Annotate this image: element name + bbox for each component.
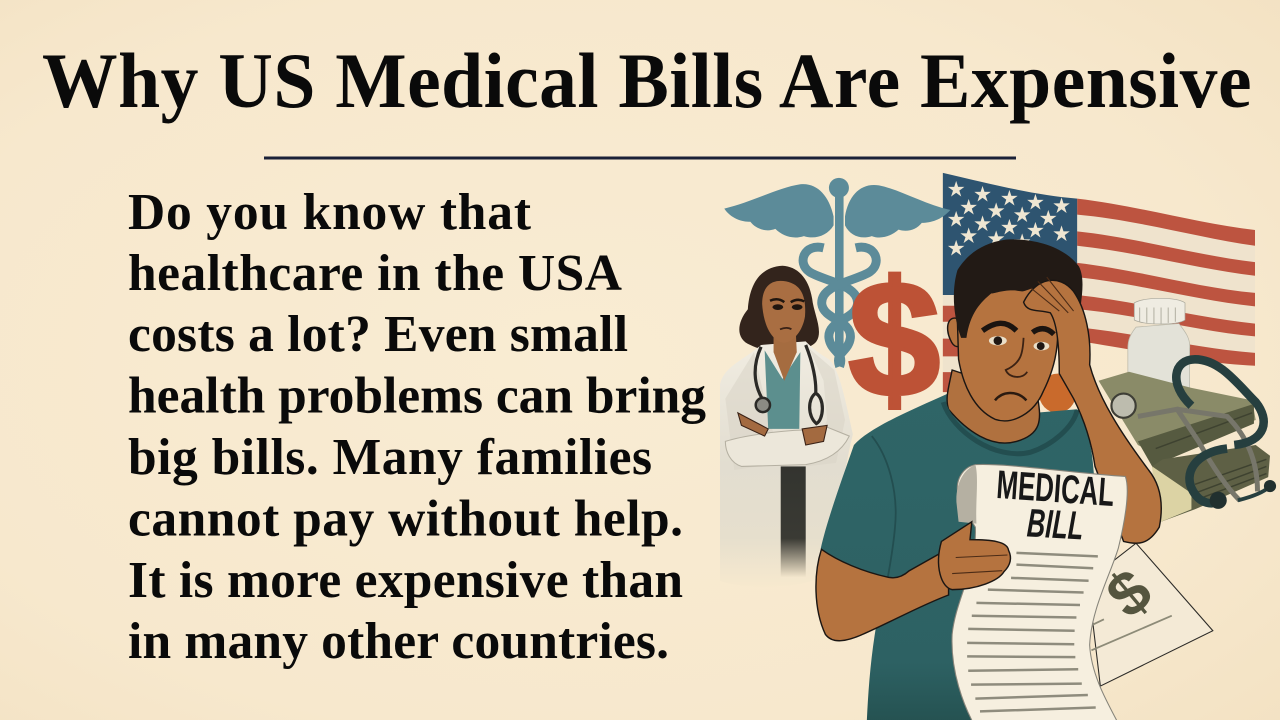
illustration: [720, 173, 1276, 720]
man ear: [948, 318, 963, 347]
body paragraph: Do you know that: [128, 184, 531, 241]
icon: stacks of money: [1099, 372, 1270, 522]
icon: American flag: ★: [988, 229, 1005, 250]
icon: American flag: ★: [1027, 193, 1044, 214]
title: Why US Medical Bills Are Expensive: [42, 37, 1252, 124]
man head: [957, 277, 1058, 421]
bill heading: MEDICAL: [995, 463, 1116, 515]
doctor arms: [725, 427, 849, 466]
body paragraph: healthcare in the USA: [128, 245, 622, 302]
icon: American flag: ★: [1014, 205, 1031, 226]
doctor figure: [720, 266, 853, 587]
icon: American flag: ★: [1027, 220, 1044, 241]
man neck: [947, 370, 1040, 443]
icon: American flag: ★: [1040, 209, 1057, 230]
icon: American flag: ★: [948, 180, 965, 201]
shirt collar: [943, 402, 1077, 454]
icon: stethoscope: [1176, 359, 1272, 503]
title underline: [264, 156, 1016, 160]
doctor trousers: [781, 466, 806, 577]
doctor scrubs: [765, 350, 800, 429]
man eyebrows and eyes: [982, 323, 1054, 334]
icon: American flag: ★: [960, 226, 977, 247]
man figure: [816, 239, 1161, 720]
man hand on bill: [939, 522, 1010, 590]
man lower arm: [816, 549, 949, 641]
body paragraph: costs a lot? Even small: [128, 306, 628, 363]
icon: caduceus: [724, 178, 950, 366]
doctor face: [762, 281, 805, 343]
second paper bill: [1088, 543, 1213, 686]
second paper bill: $: [1093, 556, 1165, 632]
icon: American flag: [943, 173, 1255, 392]
icon: American flag: ★: [988, 201, 1005, 222]
raised hand finger lines: [1031, 277, 1074, 313]
man hair: [954, 239, 1082, 338]
bill heading: BILL: [1026, 501, 1085, 548]
man nose and mouth: [1006, 338, 1027, 377]
icon: dollar sign: $: [849, 247, 940, 431]
icon: American flag: ★: [974, 184, 991, 205]
body paragraph: cannot pay without help.: [128, 490, 683, 548]
icon: American flag: ★: [1014, 232, 1031, 253]
doctor coat: [720, 341, 853, 587]
icon: American flag: ★: [1001, 189, 1018, 210]
doctor eyes and mouth: [770, 299, 804, 302]
icon: American flag: ★: [948, 209, 965, 230]
body paragraph: big bills. Many families: [128, 429, 652, 486]
doctor neck: [774, 331, 797, 381]
bill heading: [995, 463, 1116, 548]
body paragraph: [128, 184, 706, 670]
icon: American flag: ★: [1053, 224, 1070, 245]
bill text lines: [967, 553, 1105, 720]
body paragraph: in many other countries.: [128, 613, 669, 670]
icon: American flag: ★: [1001, 218, 1018, 239]
orange pills: [1039, 374, 1076, 413]
man shirt: [821, 393, 1099, 720]
icon: American flag: ★: [948, 238, 965, 259]
doctor coat shading: [725, 349, 845, 470]
icon: American flag: ★: [1053, 196, 1070, 217]
icon: American flag: ★: [974, 214, 991, 235]
doctor stethoscope: [755, 345, 822, 424]
metal stethoscope tubes: [1138, 409, 1257, 500]
shirt sleeve seam: [872, 436, 896, 577]
body paragraph: It is more expensive than: [128, 552, 683, 609]
icon: pill bottle: [1128, 298, 1190, 407]
medical bill document: [952, 463, 1127, 720]
icon: American flag: ★: [960, 198, 977, 219]
doctor hair: [739, 266, 819, 351]
man raised arm and hand: [1024, 280, 1161, 543]
body paragraph: health problems can bring: [128, 368, 706, 424]
